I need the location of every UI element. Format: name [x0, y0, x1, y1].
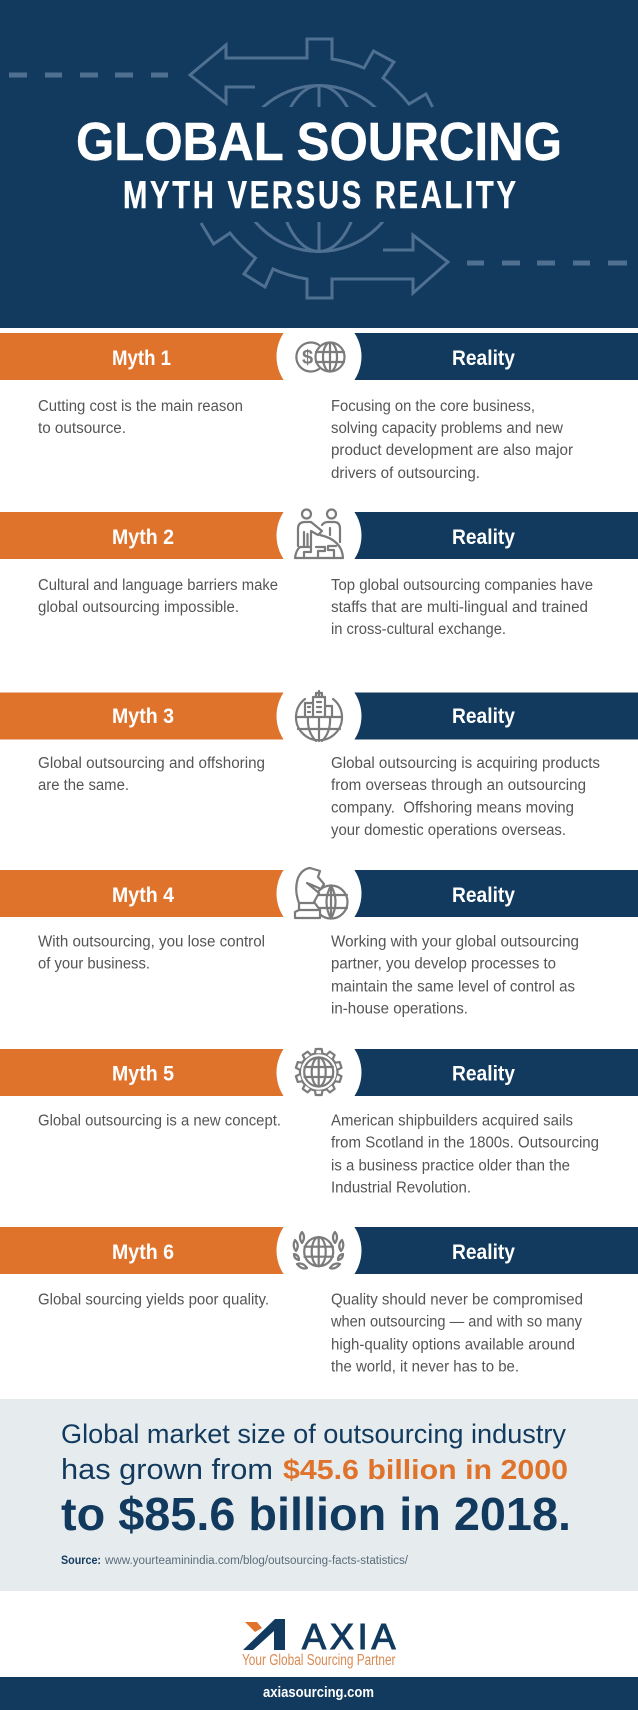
reality 2 label: Reality [452, 526, 515, 549]
reality 3 text [331, 755, 600, 839]
myth 4 text: With outsourcing, you lose control [38, 934, 265, 950]
reality 1 text [331, 398, 573, 482]
myth 3 text [38, 755, 265, 794]
reality 5 label: Reality [452, 1062, 515, 1086]
reality 6 text: high-quality options available around [331, 1336, 575, 1354]
logo: AXIA [242, 1616, 396, 1669]
reality 5 text: American shipbuilders acquired sails [331, 1112, 573, 1130]
reality 1 text: solving capacity problems and new [331, 420, 564, 437]
reality 2 text: Top global outsourcing companies have [331, 577, 593, 594]
myth 3 label: Myth 3 [112, 705, 174, 728]
panel: market size statistic [0, 1399, 638, 1591]
reality 2 text [331, 577, 593, 638]
icon: globe with laurel wreath [294, 1232, 343, 1268]
myth 2 text: global outsourcing impossible. [38, 599, 239, 616]
myth 3 text: Global outsourcing and offshoring [38, 755, 265, 772]
icon: dollar coin and globe: $ [302, 347, 313, 369]
icon: gear with globe [296, 1049, 342, 1095]
statistic line 3: to $85.6 billion in 2018. [61, 1488, 571, 1540]
reality 6 text [330, 1292, 583, 1376]
subtitle: MYTH VERSUS REALITY [123, 174, 516, 217]
icon: chess knight and globe [295, 868, 348, 918]
icon: gear with arrows and globe [9, 39, 627, 298]
panel: myth 2 [0, 493, 638, 638]
reality 4 text: Working with your global outsourcing [331, 934, 579, 950]
reality 3 label: Reality [452, 705, 515, 728]
reality 1 label: Reality [452, 347, 515, 370]
panel: header [0, 0, 638, 328]
reality 3 text: company. Offshoring means moving [331, 800, 574, 816]
myth 1 text: Cutting cost is the main reason [38, 398, 243, 415]
icon: dollar coin and globe [296, 342, 344, 372]
wordmark: AXIA [302, 1616, 396, 1657]
reality 5 text: is a business practice older than the [331, 1158, 570, 1174]
myth 1 label: Myth 1 [112, 347, 171, 370]
panel: myth 5 [0, 1030, 638, 1196]
myth 5 label: Myth 5 [112, 1062, 174, 1086]
icon: logo mark [243, 1619, 285, 1650]
myth 6 label: Myth 6 [112, 1241, 174, 1264]
reality 5 text [331, 1112, 599, 1196]
myth 5 text: Global outsourcing is a new concept. [38, 1112, 281, 1130]
reality 5 text: from Scotland in the 1800s. Outsourcing [331, 1134, 599, 1152]
reality 2 text: staffs that are multi-lingual and trained [331, 599, 588, 616]
reality 4 label: Reality [452, 884, 515, 907]
reality 6 label: Reality [452, 1241, 515, 1264]
title: GLOBAL SOURCING [76, 112, 562, 172]
myth 2 text: Cultural and language barriers make [38, 577, 278, 594]
reality 6 text: when outsourcing — and with so many [330, 1314, 582, 1330]
myth 1 text [38, 398, 243, 437]
reality 3 text: your domestic operations overseas. [331, 822, 566, 839]
myth 3 text: are the same. [38, 777, 129, 794]
myth 1 text: to outsource. [38, 420, 126, 437]
reality 4 text [331, 934, 579, 1018]
reality 6 text: the world, it never has to be. [331, 1358, 519, 1376]
statistic line 2: has grown from [61, 1454, 273, 1486]
reality 1 text: product development are also major [331, 442, 573, 459]
reality 6 text: Quality should never be compromised [331, 1292, 583, 1308]
reality 4 text: partner, you develop processes to [331, 956, 556, 972]
panel: myth 1 [0, 333, 638, 482]
myth 2 text [38, 577, 278, 616]
reality 2 text: in cross-cultural exchange. [331, 621, 506, 638]
reality 5 text: Industrial Revolution. [331, 1180, 471, 1196]
myth 4 label: Myth 4 [112, 884, 174, 907]
myth 2 label: Myth 2 [112, 526, 174, 549]
reality 4 text: in-house operations. [331, 1000, 468, 1018]
reality 4 text: maintain the same level of control as [331, 978, 575, 996]
icon: globe with city buildings [296, 691, 342, 741]
icon: two people on a globe [295, 510, 343, 558]
myth 4 text: of your business. [38, 956, 150, 972]
statistic line 2 [61, 1454, 568, 1486]
footer bar [0, 1677, 638, 1710]
panel: myth 3 [0, 674, 638, 839]
myth 4 text [38, 934, 265, 972]
source: Source: [61, 1555, 101, 1567]
website: axiasourcing.com [263, 1685, 374, 1701]
panel: myth 6 [0, 1208, 638, 1376]
reality 3 text: from overseas through an outsourcing [331, 777, 586, 794]
statistic line 1: Global market size of outsourcing industry [61, 1419, 566, 1449]
source: www.yourteaminindia.com/blog/outsourcing-facts-statistics/ [104, 1555, 409, 1567]
reality 3 text: Global outsourcing is acquiring products [331, 755, 600, 772]
reality 1 text: Focusing on the core business, [331, 398, 535, 415]
reality 1 text: drivers of outsourcing. [331, 465, 480, 482]
statistic line 2: $45.6 billion in 2000 [283, 1454, 568, 1485]
panel: myth 4 [0, 851, 638, 1018]
tagline: Your Global Sourcing Partner [242, 1652, 396, 1669]
myth 6 text: Global sourcing yields poor quality. [38, 1292, 269, 1308]
